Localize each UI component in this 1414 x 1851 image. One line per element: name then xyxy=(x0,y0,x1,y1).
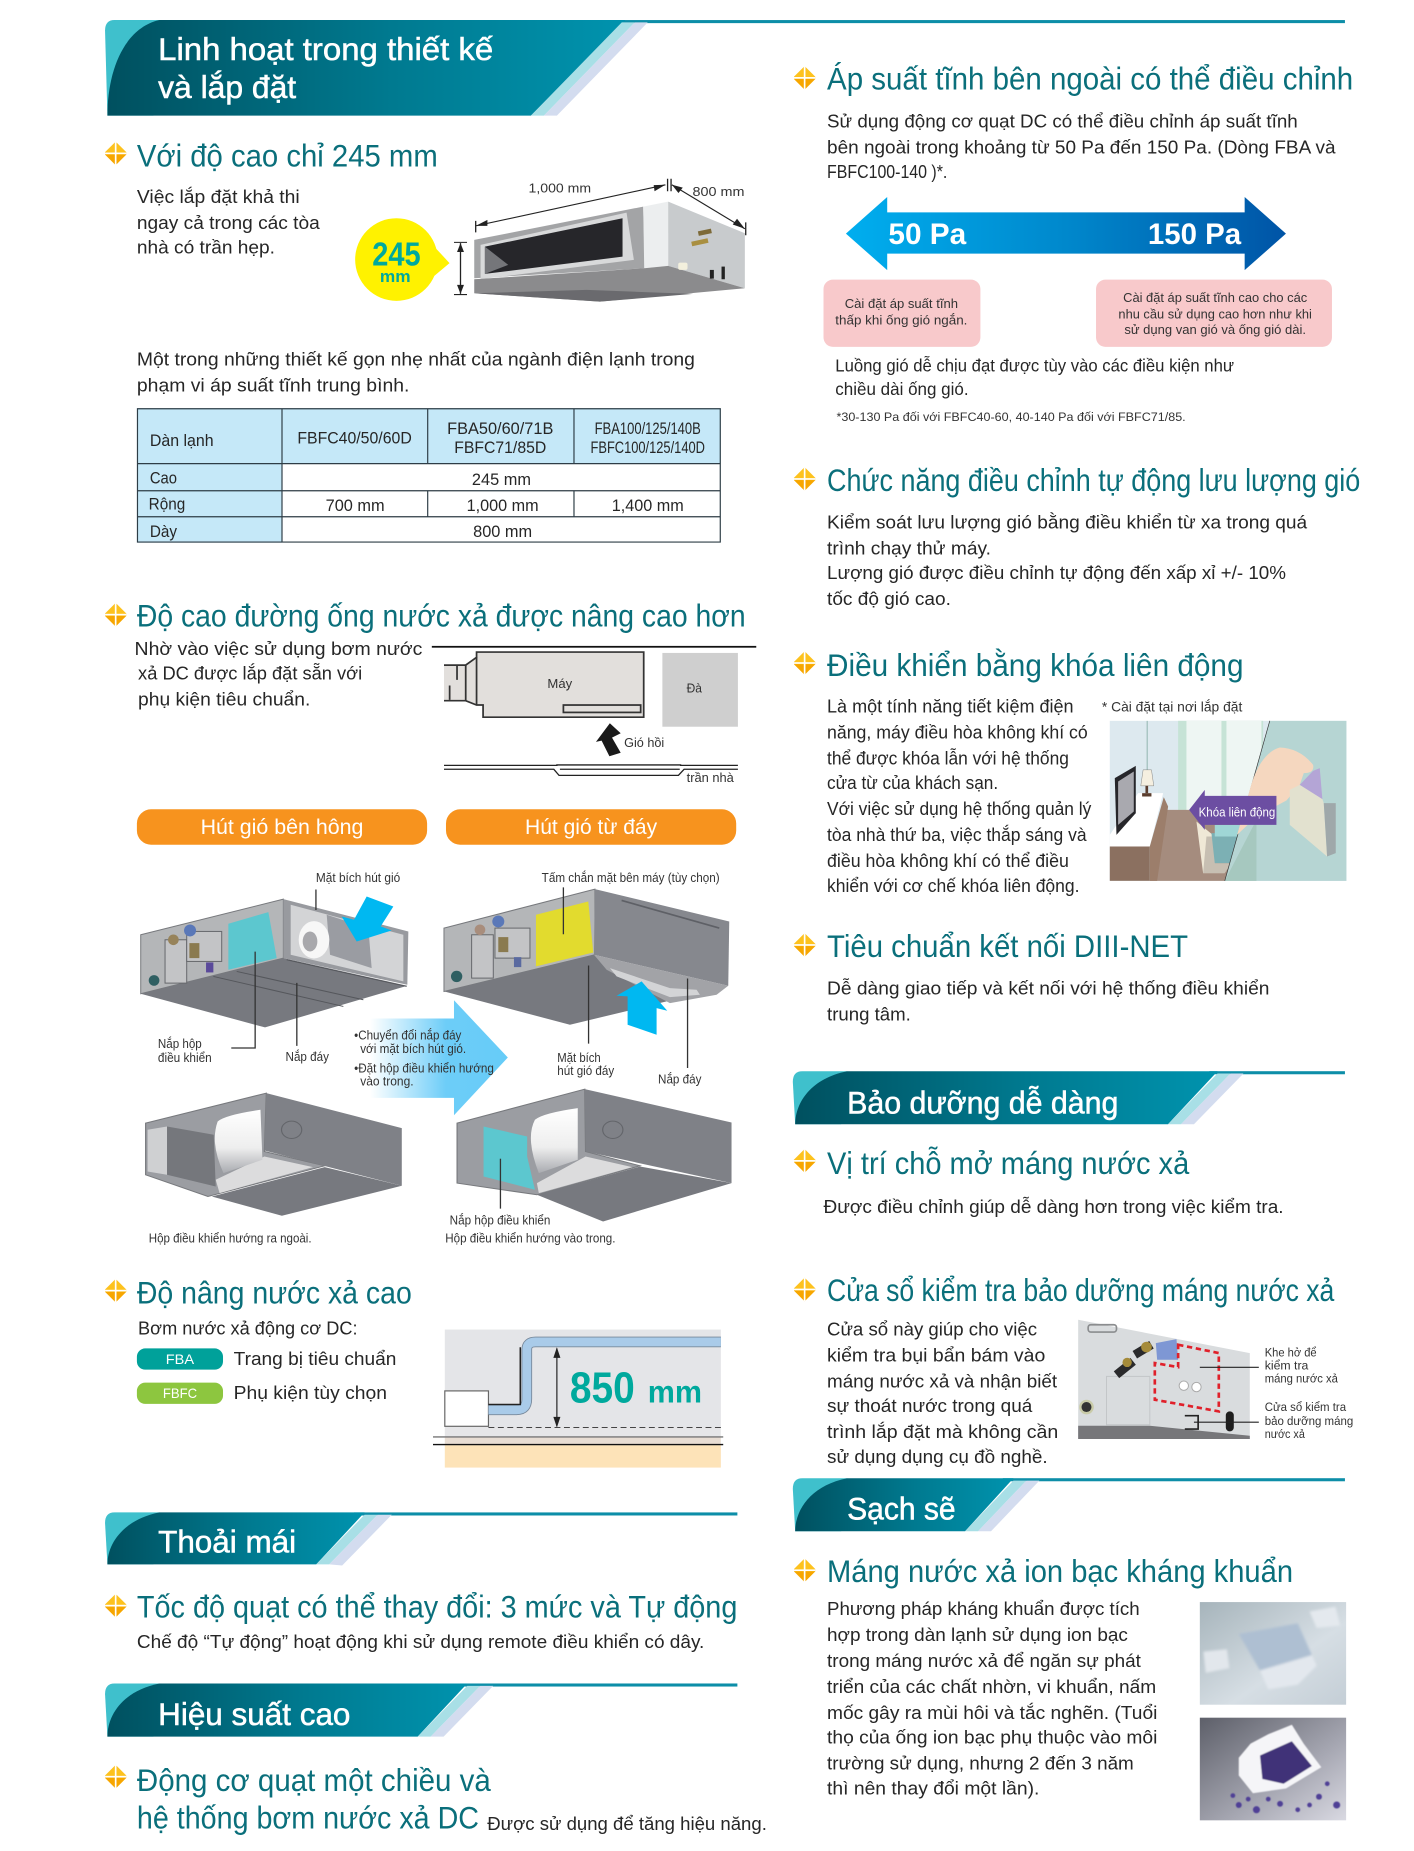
callout: inspection window label: Cửa sổ kiểm tra xyxy=(1265,1401,1347,1414)
banner: Thoải mái: Thoải mái xyxy=(158,1524,296,1560)
heading: DC fan motor and drain pump: hệ thống bơm nước xả DC xyxy=(137,1800,479,1836)
text: interlock description: điều hòa không khí có thể điều xyxy=(827,850,1069,871)
callout: inspection gap: máng nước xả xyxy=(1265,1373,1338,1386)
banner: Bảo dưỡng dễ dàng: Bảo dưỡng dễ dàng xyxy=(847,1085,1118,1121)
icon: diamond bullet xyxy=(794,651,815,675)
diagram: 850 mm drain raise xyxy=(433,1330,723,1468)
text: DC drain pump: Bơm nước xả động cơ DC: xyxy=(138,1317,358,1338)
text: airflow description xyxy=(827,512,1308,609)
table: dimensions by model xyxy=(137,408,721,543)
panel: interlock control xyxy=(794,647,1346,896)
callout: inspection gap: kiểm tra xyxy=(1265,1360,1309,1373)
illustration: bottom intake unit: Nắp đáy xyxy=(658,1072,702,1087)
legend: FBFC option: FBFC xyxy=(163,1385,197,1401)
heading: interlock control: Điều khiển bằng khóa liên động xyxy=(827,647,1243,683)
text: airflow comfort xyxy=(835,355,1234,399)
panel: height 245 mm xyxy=(105,137,746,543)
panel: fan speed xyxy=(105,1588,737,1652)
illustration: bottom intake unit: Tấm chắn mặt bên máy (tùy chọn) xyxy=(542,870,720,885)
callout: 245 mm: 245 xyxy=(372,235,421,272)
illustration: side intake unit: Nắp đáy xyxy=(286,1049,329,1064)
text: drain pump note: Nhờ vào việc sử dụng bơm nước xyxy=(135,638,422,659)
banner: Hiệu suất cao xyxy=(105,1683,737,1737)
text: DIII-NET description: trung tâm. xyxy=(827,1003,911,1024)
callout: inspection gap: Khe hở để xyxy=(1265,1347,1317,1360)
callout: 245 mm xyxy=(355,218,450,301)
callout: low static pressure xyxy=(823,280,980,347)
legend: FBA standard xyxy=(137,1348,396,1370)
icon: diamond bullet xyxy=(105,603,126,626)
callout: low static pressure: Cài đặt áp suất tĩnh xyxy=(845,296,958,311)
text: pressure range: bên ngoài trong khoảng từ 50 Pa đến 150 Pa. (Dòng FBA và xyxy=(827,136,1336,157)
text: silver ion description: triển của các chất nhờn, vi khuẩn, nấm xyxy=(827,1676,1156,1697)
banner: Linh hoạt trong thiết kế và lắp đặt: Linh hoạt trong thiết kế xyxy=(158,31,493,67)
note: on-site setting: * Cài đặt tại nơi lắp đặt xyxy=(1102,698,1242,714)
heading: drain lift: Độ nâng nước xả cao xyxy=(137,1275,412,1311)
icon: diamond bullet xyxy=(794,467,815,491)
text: pressure range: FBFC100-140 )*. xyxy=(827,161,947,182)
illustration: bottom intake unit: hút gió đáy xyxy=(557,1063,615,1078)
icon: diamond bullet xyxy=(794,1558,815,1582)
illustration: control box facing in xyxy=(445,1089,732,1245)
table: dimensions by model: 1,000 mm xyxy=(467,497,539,515)
label: side intake xyxy=(137,809,427,845)
icon: diamond bullet xyxy=(794,1278,815,1301)
text: inspection window description: máng nước xả và nhận biết xyxy=(827,1370,1058,1391)
text: interlock description: khiển với cơ chế khóa liên động. xyxy=(827,875,1080,896)
text: silver ion description: Phương pháp kháng khuẩn được tích xyxy=(827,1598,1140,1619)
panel: high drain lift xyxy=(105,1275,723,1468)
text: airflow comfort: chiều dài ống gió. xyxy=(835,379,969,399)
banner: Sạch sẽ xyxy=(793,1478,1345,1531)
callout: inspection window label: bảo dưỡng máng xyxy=(1265,1415,1353,1428)
diagram: unit below ceiling with beam: Gió hồi xyxy=(624,735,664,750)
panel: automatic airflow adjustment xyxy=(794,462,1360,609)
text: airflow comfort: Luồng gió dễ chịu đạt được tùy vào các điều kiện như xyxy=(835,355,1234,376)
table: dimensions by model: FBA100/125/140B xyxy=(595,420,701,438)
diagram: 850 mm drain raise: mm xyxy=(648,1374,702,1410)
panel: silver ion drain pan xyxy=(794,1553,1346,1820)
diagram: unit below ceiling with beam xyxy=(432,646,756,785)
callout: high static pressure: Cài đặt áp suất tĩnh cao cho các xyxy=(1123,290,1308,305)
photo: silver ion cartridge in pan xyxy=(1200,1602,1346,1705)
text: interlock description: năng, máy điều hòa không khí có xyxy=(827,722,1088,743)
callout: 245 mm: mm xyxy=(380,268,411,286)
panel: adjustable external static pressure xyxy=(794,61,1353,424)
illustration: bottom intake unit: Mặt bích xyxy=(557,1050,601,1065)
table: dimensions by model: 245 mm xyxy=(472,471,531,489)
text: airflow description: Kiểm soát lưu lượng gió bằng điều khiển từ xa trong quá xyxy=(827,512,1308,533)
legend: FBA standard: Trang bị tiêu chuẩn xyxy=(234,1348,396,1369)
label: bottom intake xyxy=(446,809,736,845)
text: auto mode: Chế độ “Tự động” hoạt động khi sử dụng remote điều khiển có dây. xyxy=(137,1631,704,1652)
text: airflow description: Lượng gió được điều chỉnh tự động đến xấp xỉ +/- 10% xyxy=(827,562,1286,583)
table: dimensions by model: Rộng xyxy=(149,496,185,514)
text: interlock description: thể được khóa lẫn với hệ thống xyxy=(827,747,1069,768)
legend: FBFC option xyxy=(137,1382,387,1404)
diagram: unit below ceiling with beam: Máy xyxy=(547,676,573,691)
text: silver ion description xyxy=(827,1598,1157,1798)
text: installation note xyxy=(137,186,320,258)
text: installation note: Việc lắp đặt khả thi xyxy=(137,186,300,207)
heading: DC fan motor and drain pump xyxy=(137,1762,491,1836)
footnote: pressure by model: *30-130 Pa đối với FBFC40-60, 40-140 Pa đối với FBFC71/85. xyxy=(836,411,1186,424)
text: silver ion description: mốc gây ra mùi hôi và tắc nghẽn. (Tuổi xyxy=(827,1702,1157,1723)
callout: inspection window label: nước xả xyxy=(1265,1428,1305,1441)
illustration: control box facing in: Hộp điều khiển hướng vào trong. xyxy=(445,1230,615,1245)
icon: diamond bullet xyxy=(105,1765,126,1788)
text: installation note: nhà có trần hẹp. xyxy=(137,237,275,258)
text: inspection window description: sử dụng dụng cụ đồ nghề. xyxy=(827,1446,1048,1467)
callout: high static pressure: sử dụng van gió và ống gió dài. xyxy=(1124,322,1306,337)
illustration: ducted indoor unit with dimensions: 1,000 mm xyxy=(529,180,591,195)
table: dimensions by model: 1,400 mm xyxy=(612,497,684,515)
heading: static pressure: Áp suất tĩnh bên ngoài có thể điều chỉnh xyxy=(827,61,1353,97)
callout: low static pressure: thấp khi ống gió ngắn. xyxy=(835,312,967,327)
text: interlock description: Với việc sử dụng hệ thống quản lý xyxy=(827,798,1092,819)
banner: Sạch sẽ: Sạch sẽ xyxy=(847,1490,956,1526)
text: inspection window description: kiểm tra bụi bẩn bám vào xyxy=(827,1344,1045,1365)
text: interlock description: cửa từ của khách sạn. xyxy=(827,772,998,793)
table: dimensions by model: FBFC40/50/60D xyxy=(297,430,412,448)
heading: fan speed: Tốc độ quạt có thể thay đổi: 3 mức và Tự động xyxy=(137,1588,737,1624)
callout: high static pressure xyxy=(1096,280,1332,347)
illustration: ducted indoor unit with dimensions xyxy=(454,179,746,302)
icon: diamond bullet xyxy=(794,933,815,957)
diagram: unit below ceiling with beam: trần nhà xyxy=(687,770,735,785)
illustration: hotel room key card xyxy=(1110,721,1346,881)
text: inspection window description: Cửa sổ này giúp cho việc xyxy=(827,1318,1037,1339)
panel: DC motor and pump xyxy=(105,1762,767,1836)
callout: inspection gap xyxy=(1200,1347,1338,1386)
text: compact design description: Một trong những thiết kế gọn nhẹ nhất của ngành điện lạnh trong xyxy=(137,349,695,370)
table: dimensions by model: FBA50/60/71B xyxy=(447,420,553,438)
arrow: conversion steps: •Chuyển đổi nắp đáy xyxy=(354,1028,462,1043)
table: dimensions by model: 800 mm xyxy=(473,523,532,541)
text: installation note: ngay cả trong các tòa xyxy=(137,212,320,233)
icon: diamond bullet xyxy=(105,1594,126,1617)
heading: DIII-NET: Tiêu chuẩn kết nối DIII-NET xyxy=(827,928,1188,964)
legend: FBA standard: FBA xyxy=(166,1351,195,1367)
text: drain pump note: xả DC được lắp đặt sẵn với xyxy=(138,663,362,684)
text: DIII-NET description xyxy=(827,978,1269,1024)
text: silver ion description: trong máng nước xả để ngăn sự phát xyxy=(827,1650,1142,1671)
text: inspection window description: trình lắp đặt mà không cần xyxy=(827,1421,1058,1442)
icon: diamond bullet xyxy=(794,66,815,90)
heading: drain pan opening: Vị trí chỗ mở máng nước xả xyxy=(827,1145,1189,1181)
banner: Thoải mái xyxy=(105,1512,737,1566)
text: silver ion description: trường sử dụng, nhưng 2 đến 3 năm xyxy=(827,1753,1134,1774)
icon: diamond bullet xyxy=(794,1149,815,1173)
photo: silver ion granules xyxy=(1200,1718,1346,1820)
table: dimensions by model: Dày xyxy=(150,523,178,541)
label: side intake: Hút gió bên hông xyxy=(201,816,363,839)
callout: inspection window label xyxy=(1194,1401,1353,1441)
illustration: bottom intake unit xyxy=(444,870,729,1087)
illustration: side intake unit: Nắp hộp xyxy=(158,1036,202,1051)
arrow: 50 Pa to 150 Pa xyxy=(846,197,1286,270)
heading: drain pipe: Độ cao đường ống nước xả được nâng cao hơn xyxy=(137,597,746,633)
text: airflow description: trình chạy thử máy. xyxy=(827,537,991,558)
table: dimensions by model: 700 mm xyxy=(326,497,385,515)
text: DIII-NET description: Dễ dàng giao tiếp và kết nối với hệ thống điều khiển xyxy=(827,978,1269,999)
illustration: control box facing out xyxy=(146,1093,402,1245)
text: drain pump note: phụ kiện tiêu chuẩn. xyxy=(138,688,310,709)
legend: FBFC option: Phụ kiện tùy chọn xyxy=(234,1382,387,1403)
table: dimensions by model: Dàn lạnh xyxy=(150,432,214,450)
banner: Hiệu suất cao: Hiệu suất cao xyxy=(158,1696,350,1732)
table: dimensions by model: FBFC100/125/140D xyxy=(591,439,705,457)
table: dimensions by model: FBFC71/85D xyxy=(454,439,546,457)
diagram: unit below ceiling with beam: Đà xyxy=(687,681,703,696)
table: dimensions by model: Cao xyxy=(150,470,177,488)
panel: DIII-NET xyxy=(794,928,1269,1024)
text: pressure range xyxy=(827,110,1336,182)
text: interlock description: Là một tính năng tiết kiệm điện xyxy=(827,696,1074,717)
text: silver ion description: thì nên thay đổi một lần). xyxy=(827,1777,1039,1798)
illustration: control box facing out: Hộp điều khiển hướng ra ngoài. xyxy=(149,1230,312,1245)
text: inspection window description: sự thoát nước trong quá xyxy=(827,1395,1033,1416)
heading: silver ion: Máng nước xả ion bạc kháng khuẩn xyxy=(827,1553,1293,1589)
text: performance: Được sử dụng để tăng hiệu năng. xyxy=(487,1813,767,1834)
arrow: conversion steps xyxy=(354,1000,508,1115)
icon: diamond bullet xyxy=(105,142,126,165)
callout: high static pressure: nhu cầu sử dụng cao hơn như khi xyxy=(1118,307,1312,322)
arrow: 50 Pa to 150 Pa: 50 Pa xyxy=(888,218,967,251)
banner: Linh hoạt trong thiết kế và lắp đặt xyxy=(105,20,1345,116)
illustration: control box facing in: Nắp hộp điều khiển xyxy=(450,1212,550,1227)
text: pressure range: Sử dụng động cơ quạt DC có thể điều chỉnh áp suất tĩnh xyxy=(827,110,1298,131)
banner: Bảo dưỡng dễ dàng xyxy=(793,1071,1345,1124)
arrow: 50 Pa to 150 Pa: 150 Pa xyxy=(1148,218,1242,251)
arrow: conversion steps: •Đặt hộp điều khiển hướng xyxy=(354,1060,494,1075)
panel: drain pan opening xyxy=(794,1145,1284,1217)
illustration: side intake unit: điều khiển xyxy=(158,1050,212,1065)
text: airflow description: tốc độ gió cao. xyxy=(827,588,951,609)
heading: height: Với độ cao chỉ 245 mm xyxy=(137,137,438,173)
text: drain pump note xyxy=(135,638,422,709)
text: interlock description: tòa nhà thứ ba, việc thắp sáng và xyxy=(827,824,1087,845)
panel: inspection window xyxy=(794,1272,1353,1467)
photo: inspection window on unit xyxy=(1078,1320,1250,1439)
arrow: conversion steps: với mặt bích hút gió. xyxy=(360,1041,466,1056)
illustration: hotel room key card: Khóa liên động xyxy=(1199,804,1275,819)
text: inspection window description xyxy=(827,1318,1058,1467)
label: bottom intake: Hút gió từ đáy xyxy=(525,816,658,839)
banner: Linh hoạt trong thiết kế và lắp đặt: và lắp đặt xyxy=(158,69,296,105)
text: compact design description xyxy=(137,349,695,396)
text: compact design description: phạm vi áp suất tĩnh trung bình. xyxy=(137,375,409,396)
text: interlock description xyxy=(827,696,1092,896)
panel: drain pipe height xyxy=(105,597,756,1245)
text: inspection: Được điều chỉnh giúp dễ dàng hơn trong việc kiểm tra. xyxy=(823,1196,1284,1217)
arrow: conversion steps: vào trong. xyxy=(360,1073,414,1088)
illustration: side intake unit: Mặt bích hút gió xyxy=(316,870,400,885)
diagram: 850 mm drain raise: 850 xyxy=(570,1364,635,1413)
icon: diamond bullet xyxy=(105,1279,126,1302)
illustration: side intake unit xyxy=(141,870,408,1065)
text: silver ion description: thọ của ống ion bạc phụ thuộc vào môi xyxy=(827,1727,1157,1748)
heading: DC fan motor and drain pump: Động cơ quạt một chiều và xyxy=(137,1762,491,1798)
text: silver ion description: hợp trong dàn lạnh sử dụng ion bạc xyxy=(827,1624,1128,1645)
illustration: ducted indoor unit with dimensions: 800 mm xyxy=(693,184,744,199)
